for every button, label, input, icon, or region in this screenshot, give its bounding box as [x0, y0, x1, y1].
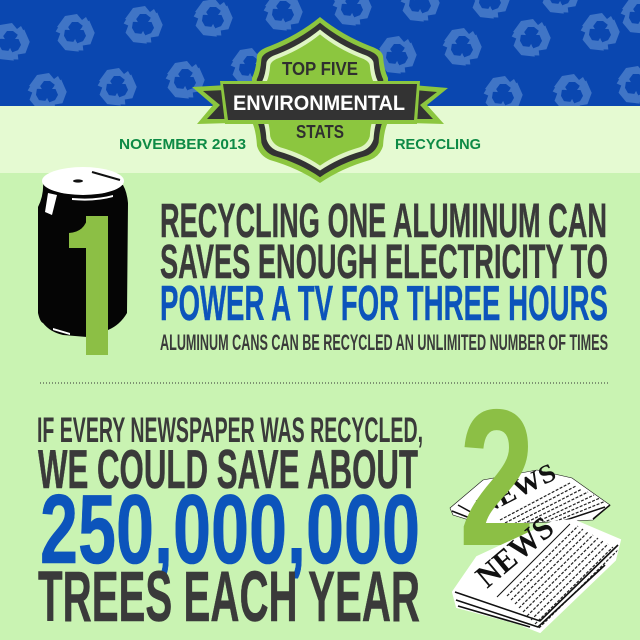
front newspaper columns	[507, 526, 618, 628]
stat 2 text	[37, 411, 423, 637]
stat 1 text	[160, 195, 608, 355]
back newspaper masthead: NEWS	[473, 457, 561, 521]
recycling symbol pattern	[0, 0, 640, 120]
can highlights	[45, 193, 113, 335]
ribbon tails	[192, 85, 448, 124]
back newspaper	[450, 464, 610, 524]
front newspaper rule	[497, 524, 570, 597]
can body	[38, 182, 128, 337]
back newspaper columns	[500, 482, 604, 523]
badge line 2: ENVIRONMENTAL	[233, 92, 405, 115]
badge line 3: STATS	[296, 122, 344, 142]
ribbon	[220, 81, 420, 124]
can tab hole	[73, 179, 83, 183]
numeral 1: 1	[60, 172, 120, 398]
numeral 1	[69, 216, 108, 355]
category label: RECYCLING	[395, 136, 481, 153]
front newspaper masthead: NEWS	[468, 509, 560, 594]
stat 1 can icon	[38, 167, 128, 337]
can details	[92, 172, 120, 180]
badge	[192, 17, 448, 183]
date band	[0, 106, 640, 173]
front newspaper	[453, 509, 620, 632]
can lid	[42, 167, 124, 195]
header band: blue	[0, 0, 640, 106]
date label: NOVEMBER 2013	[119, 136, 246, 153]
big number: 250,000,000	[40, 474, 420, 584]
numeral 2: 2	[459, 369, 535, 587]
back newspaper edge	[452, 505, 610, 524]
badge shield	[252, 17, 388, 183]
badge line 1: TOP FIVE	[282, 59, 358, 79]
ribbon centre	[223, 84, 417, 120]
front newspaper edge	[455, 545, 618, 627]
